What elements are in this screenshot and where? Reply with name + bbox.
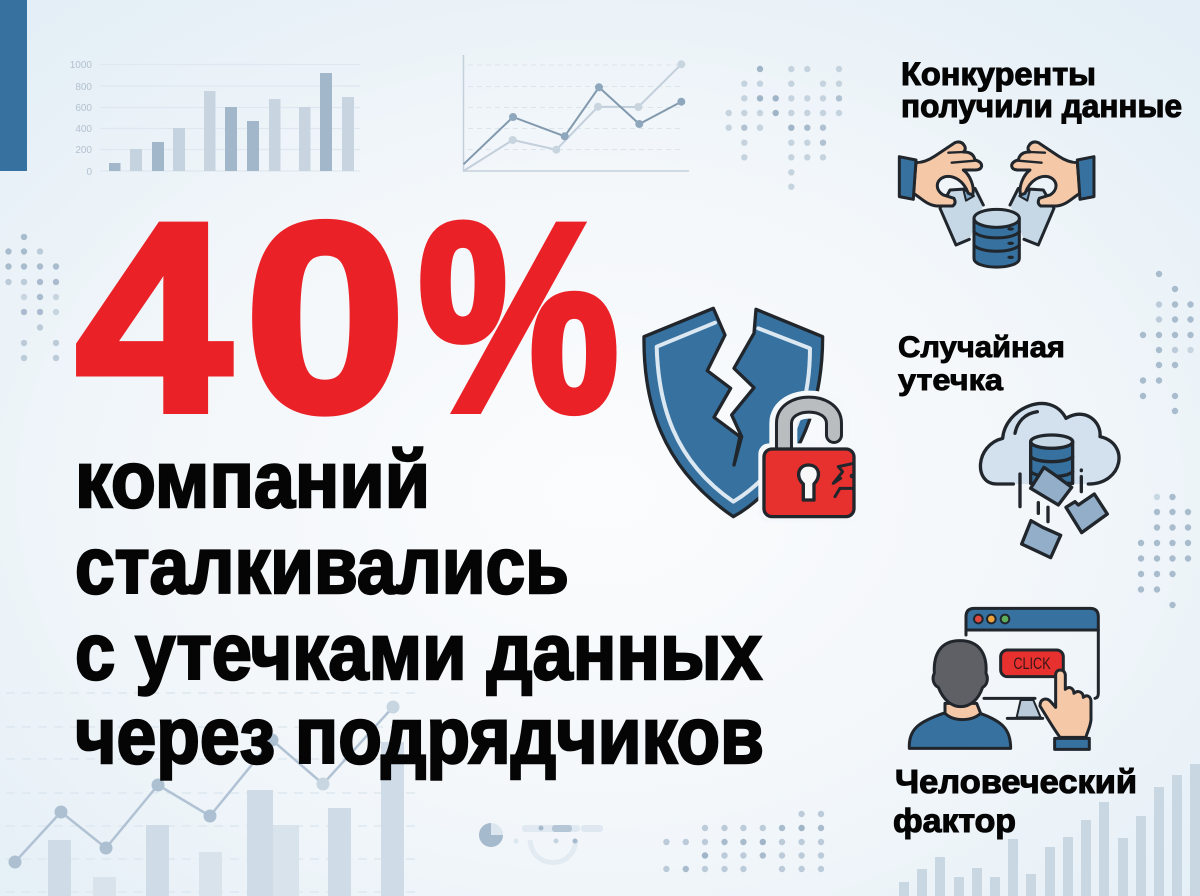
big number 40%: 4	[76, 167, 233, 467]
big number 40%	[76, 167, 619, 468]
label: human factor: Человеческий	[895, 763, 1137, 800]
big number 40%: %	[418, 168, 619, 467]
dot pattern: right lower	[1138, 494, 1191, 608]
icon: broken shield with lock	[644, 308, 860, 523]
big number 40%: 0	[245, 168, 406, 468]
main statement: через подрядчиков	[75, 691, 764, 780]
right hand	[1012, 142, 1094, 206]
blue corner accent	[0, 0, 27, 171]
bar chart: top left: 0	[86, 167, 92, 178]
main statement: сталкивались	[75, 521, 569, 610]
dot pattern: right upper	[1140, 271, 1194, 414]
bar chart: top left: 1000	[70, 60, 92, 71]
lock	[758, 405, 860, 523]
label: human factor: фактор	[893, 802, 1016, 839]
main statement: компаний	[75, 435, 430, 524]
icon: person clicking	[909, 608, 1098, 749]
bar chart: top left: 400	[75, 124, 92, 135]
left hand	[899, 142, 982, 206]
label: accidental leak	[898, 331, 1065, 397]
label: competitors	[901, 56, 1182, 124]
dot pattern: top right	[726, 66, 842, 190]
dot pattern: bottom centre	[663, 811, 824, 872]
bar chart: top left: 600	[75, 103, 92, 114]
combined chart: bottom left	[6, 693, 420, 896]
bar chart: top left: 800	[75, 82, 92, 93]
icon: cloud with falling folders	[980, 403, 1119, 558]
label: accidental leak: утечка	[898, 364, 1003, 397]
bar chart: top left: 200	[75, 145, 92, 156]
line chart: top centre	[464, 55, 689, 171]
dot pattern: left	[5, 234, 59, 361]
main statement: с утечками данных	[75, 607, 762, 696]
bar chart: bottom right	[899, 764, 1200, 896]
label: competitors: получили данные	[901, 88, 1182, 124]
label: competitors: Конкуренты	[901, 56, 1096, 92]
mini pie and gauge: bottom centre	[479, 823, 603, 862]
icon: hands taking data	[899, 142, 1094, 267]
main statement	[75, 435, 764, 780]
database	[974, 209, 1019, 267]
label: human factor	[893, 763, 1137, 839]
label: accidental leak: Случайная	[898, 331, 1065, 364]
click label: CLICK	[1013, 654, 1051, 673]
bar chart: top left	[70, 60, 360, 178]
